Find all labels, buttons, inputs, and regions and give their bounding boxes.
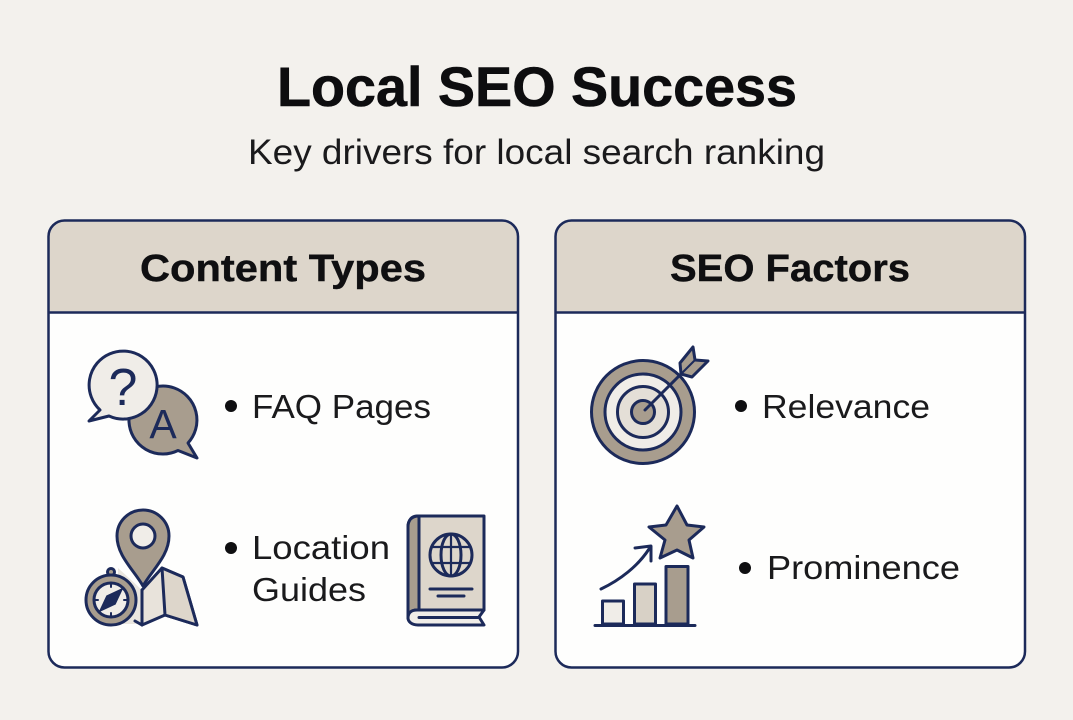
- icon: rising bars with star: [595, 506, 704, 626]
- panel: SEO factors: [556, 220, 1025, 668]
- icon: question and answer bubbles: ?: [109, 359, 137, 417]
- list item: Location Guides: [225, 529, 390, 608]
- list item: Prominence: Prominence: [767, 549, 960, 586]
- icon: question and answer bubbles: A: [149, 401, 177, 447]
- heading: content types: Content Types: [140, 248, 426, 290]
- title: Local SEO Success: [277, 55, 797, 118]
- icon: question and answer bubbles: [89, 351, 197, 458]
- icon: map pin, map and compass: [86, 510, 197, 625]
- heading: SEO factors: SEO Factors: [670, 248, 910, 290]
- icon: target with arrow: [592, 347, 708, 464]
- list item: Relevance: Relevance: [762, 388, 930, 425]
- list item: Location Guides: Guides: [252, 571, 366, 608]
- panel: content types: [48, 220, 518, 668]
- subtitle: Key drivers for local search ranking: [248, 133, 825, 172]
- list item: FAQ Pages: FAQ Pages: [252, 388, 431, 425]
- list item: Location Guides: Location: [252, 529, 390, 566]
- icon: guide book with globe: [408, 516, 484, 625]
